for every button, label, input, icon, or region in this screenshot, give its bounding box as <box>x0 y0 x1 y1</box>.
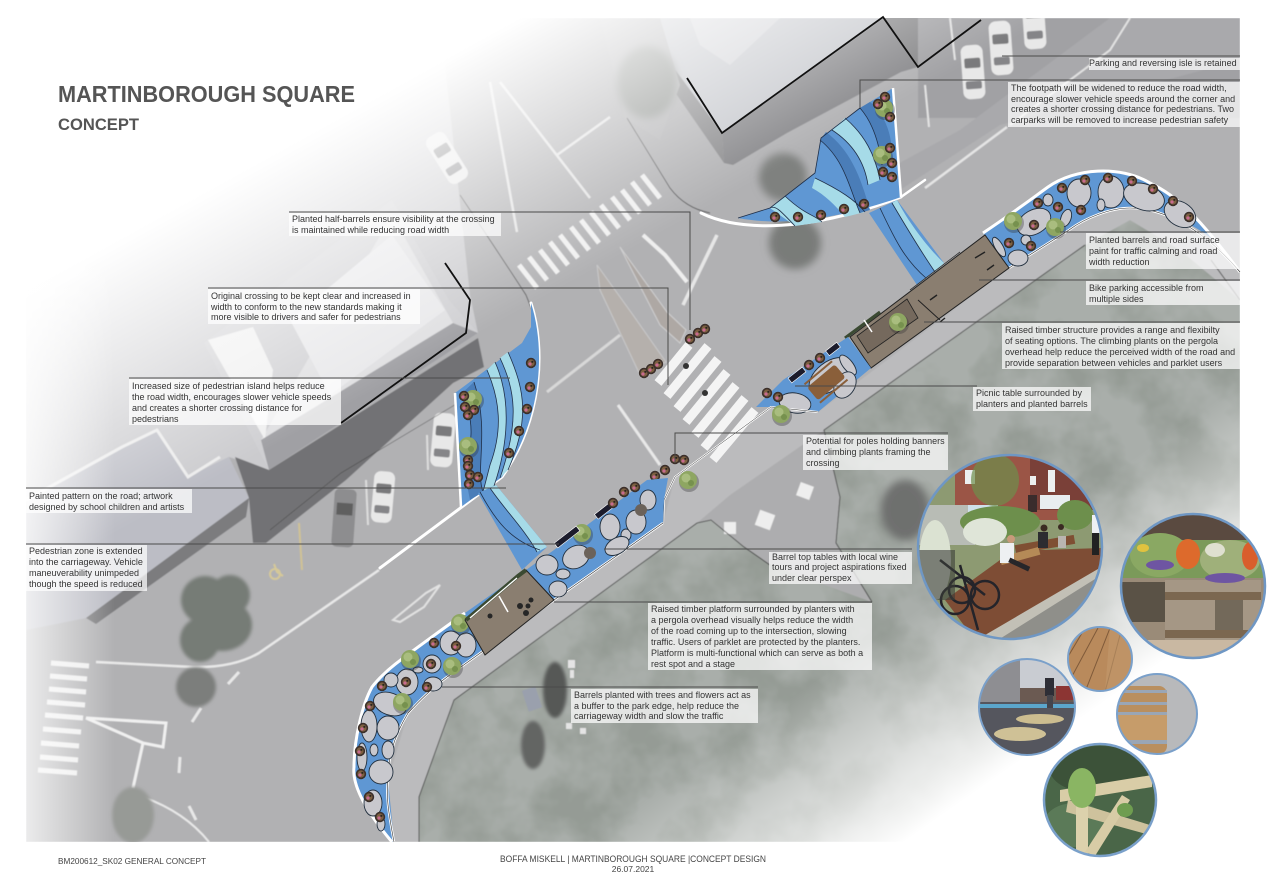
callout: raised timber platform: Raised timber platform surrounded by planters with <box>651 604 855 614</box>
callout: pedestrian zone: maneuverability unimpeded <box>29 568 139 578</box>
callout: raised timber structure: of seating options. The climbing plants on the pergola <box>1005 336 1218 346</box>
callout: footpath widened: creates a shorter crossing distance for pedestrians. Two <box>1011 104 1234 114</box>
callout: original crossing: width to conform to the new standards making it <box>210 302 402 312</box>
callout: raised timber platform: Platform is multi-functional which can serve as both a <box>651 648 863 658</box>
painted artwork: west crossing strip <box>478 485 547 570</box>
callout: poles and banners: Potential for poles holding banners <box>806 436 945 446</box>
main pedestrian crossing <box>658 345 755 460</box>
north-east kerb-build-out with barrels <box>983 171 1240 272</box>
west road kerb line <box>96 570 379 667</box>
callout: raised timber platform <box>554 602 872 670</box>
photo: painted road surface <box>978 658 1076 756</box>
cars north <box>960 44 986 100</box>
photo fades <box>26 18 1001 489</box>
photo: flower barrel <box>1120 512 1266 662</box>
kerb edge between picnic area and crossing <box>663 407 818 523</box>
callout: footpath widened: The footpath will be widened to reduce the road width, <box>1011 83 1227 93</box>
callout: footpath widened <box>860 80 1240 127</box>
callout: pedestrian island <box>129 378 510 425</box>
building parapet and shadow <box>261 323 478 470</box>
callout: parking isle <box>1002 56 1240 70</box>
callout: half-barrels <box>289 212 690 330</box>
callout: poles and banners: and climbing plants framing the <box>806 447 931 457</box>
lower-left road markings <box>86 718 166 788</box>
callout: raised timber structure: overhead help reduce the perceived width of the road and <box>1005 347 1235 357</box>
park tree shadows <box>543 662 567 718</box>
callout: pedestrian zone: into the carriageway. Vehicle <box>29 557 143 567</box>
callout: raised timber platform: of the road coming up to the intersection, slowing <box>651 626 847 636</box>
callout: pedestrian island: the road width, encourages slower vehicle speeds <box>132 392 332 402</box>
painted artwork: west island <box>455 303 539 507</box>
callout: footpath widened: carparks will be removed to increase pedestrian safety <box>1011 115 1229 125</box>
trees by footpath <box>759 153 807 201</box>
seated people <box>1000 543 1014 563</box>
park <box>419 220 1240 842</box>
callout: planted barrels <box>1060 232 1240 269</box>
photo: pergola with climbing plant <box>1043 744 1156 856</box>
callout: raised timber structure: provide separation between vehicles and parklet users <box>1005 358 1223 368</box>
callout: poles and banners <box>675 433 948 470</box>
callout: painted pattern: Painted pattern on the road; artwork <box>29 491 173 501</box>
callout: barrel top tables: Barrel top tables with local wine <box>772 552 898 562</box>
callout: pedestrian zone: Pedestrian zone is extended <box>29 546 143 556</box>
callout: barrels as buffer: Barrels planted with trees and flowers act as <box>574 690 751 700</box>
footer: project line: BOFFA MISKELL | MARTINBOROUGH SQUARE |CONCEPT DESIGN <box>500 854 766 864</box>
painted artwork: north crossing strip <box>869 200 944 285</box>
top car park <box>918 18 1240 118</box>
callout: original crossing: Original crossing to be kept clear and increased in <box>211 291 411 301</box>
callout: bike parking <box>979 280 1240 305</box>
bicycles <box>940 560 999 630</box>
callout: bike parking: Bike parking accessible from <box>1089 283 1204 293</box>
road markings <box>618 405 660 465</box>
callout: barrel top tables: tours and project aspirations fixed <box>772 562 907 572</box>
lower-left roof <box>50 432 249 624</box>
callout: barrel top tables: under clear perspex <box>772 573 852 583</box>
callout: painted pattern: designed by school children and artists <box>29 502 185 512</box>
callout: pedestrian island: Increased size of pedestrian island helps reduce <box>132 381 325 391</box>
picnic area with planters <box>756 337 871 416</box>
callout: pedestrian zone <box>26 544 559 591</box>
callout: raised timber platform: traffic. Users of parklet are protected by the planters. <box>651 637 860 647</box>
photo: timber decking <box>1066 625 1134 693</box>
lower-left crossing <box>38 663 89 773</box>
callout: half-barrels: Planted half-barrels ensure visibility at the crossing <box>292 214 495 224</box>
parklet: raised timber structure <box>845 235 1009 368</box>
raised timber platform <box>465 570 554 655</box>
callout: picnic table <box>795 386 1091 411</box>
callout: barrel top tables <box>604 549 912 584</box>
callout: raised timber platform: a pergola overhead visually helps reduce the width <box>651 615 853 625</box>
south-west kerb-build-out <box>354 478 668 842</box>
callout: pedestrian zone: though the speed is reduced <box>29 579 143 589</box>
callout: original crossing <box>208 288 668 385</box>
barrels at pole line <box>650 454 689 481</box>
tree by crossing <box>772 405 792 426</box>
callout: planted barrels: Planted barrels and road surface <box>1089 235 1220 245</box>
lines fading near the top <box>490 82 610 232</box>
callout: barrels as buffer <box>442 687 758 723</box>
callout: poles and banners: crossing <box>806 458 840 468</box>
subtitle: CONCEPT <box>58 116 139 134</box>
white road edge lines <box>380 180 925 568</box>
pedestrians on crossing <box>683 363 708 396</box>
callout: pedestrian island: pedestrians <box>132 414 179 424</box>
north building and shadow <box>677 74 724 162</box>
cars west <box>370 471 396 523</box>
title: MARTINBOROUGH SQUARE <box>58 81 355 107</box>
pavement strips beside parklet <box>388 208 1240 842</box>
callout: planted barrels: width reduction <box>1088 257 1150 267</box>
black site boundary: west building <box>341 263 470 423</box>
footer: drawing reference: BM200612_SK02 GENERAL CONCEPT <box>58 856 206 866</box>
centre island outlines <box>597 265 666 375</box>
callout: half-barrels: is maintained while reducing road width <box>292 225 449 235</box>
north-west buildings <box>46 156 478 484</box>
callout: pedestrian island: and creates a shorter crossing distance for <box>132 403 302 413</box>
callout: original crossing: more visible to drivers and safer for pedestrians <box>211 312 401 322</box>
lower-left trees <box>176 575 252 707</box>
callout: footpath widened: encourage slower vehicle speeds around the corner and <box>1011 94 1235 104</box>
callout: painted pattern <box>26 488 506 513</box>
callout: parking isle: Parking and reversing isle is retained <box>1089 58 1237 68</box>
callout: planted barrels: paint for traffic calming and road <box>1089 246 1217 256</box>
callout: picnic table: Picnic table surrounded by <box>976 388 1083 398</box>
black site boundary: north building <box>687 17 981 133</box>
callout: barrels as buffer: carriageway width and slow the traffic <box>574 711 724 721</box>
planted barrels by crossing island <box>639 324 710 378</box>
footer: date: 26.07.2021 <box>612 864 655 874</box>
photo: parklet street scene <box>915 450 1105 645</box>
pavement by park <box>697 430 872 602</box>
callout: raised timber platform: rest spot and a stage <box>651 659 735 669</box>
callout: raised timber structure <box>924 322 1240 369</box>
upper crossing <box>519 175 660 288</box>
painted artwork: north island <box>738 88 901 226</box>
callout: raised timber structure: Raised timber structure provides a range and flexibilty <box>1005 325 1220 335</box>
callout: bike parking: multiple sides <box>1089 294 1144 304</box>
callout: picnic table: planters and planted barrels <box>976 399 1088 409</box>
photo: wine barrel <box>1116 673 1198 755</box>
callout: barrels as buffer: a buffer to the park edge, help reduce the <box>574 701 739 711</box>
